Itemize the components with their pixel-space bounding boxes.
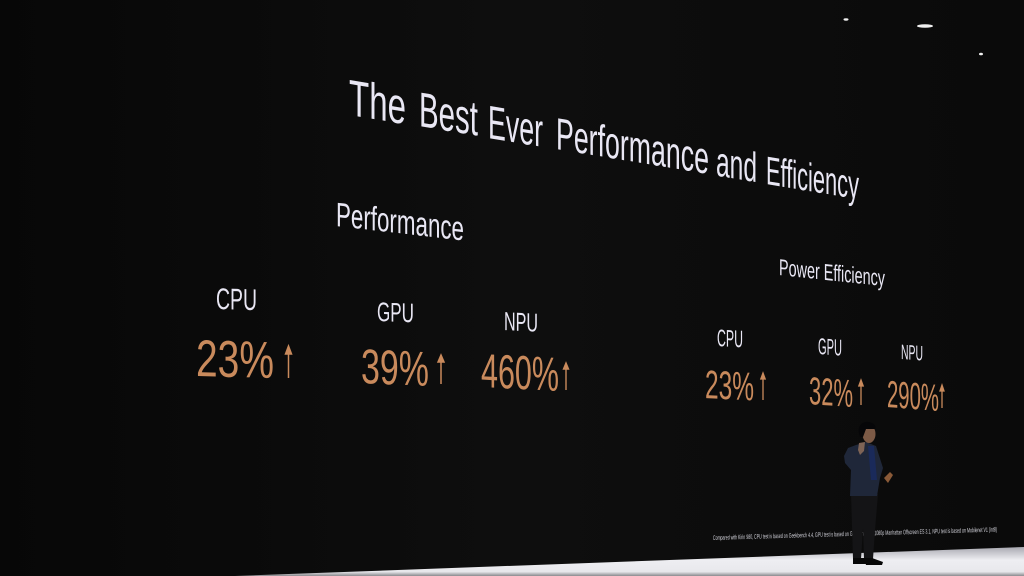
title: Ever	[488, 96, 543, 158]
metric: performance NPU: 460%	[481, 345, 559, 402]
metric: performance GPU: 39%	[361, 340, 429, 397]
title: and	[716, 138, 757, 191]
arrow: up	[859, 380, 863, 405]
arrow: up	[438, 355, 444, 384]
metric: performance GPU	[361, 297, 444, 397]
ceiling lights	[844, 18, 983, 55]
title: Efficiency	[766, 148, 859, 208]
metric: performance CPU: 23%	[196, 330, 274, 390]
metric: efficiency GPU: GPU	[818, 333, 842, 361]
metric: efficiency GPU: 32%	[809, 370, 853, 416]
title: Best	[419, 82, 478, 147]
shoes	[853, 558, 883, 565]
title: Performance	[556, 108, 709, 184]
metric: efficiency GPU	[809, 333, 863, 416]
metric: performance NPU: NPU	[504, 306, 538, 338]
head	[862, 425, 876, 443]
jacket	[844, 442, 883, 496]
presenter	[844, 422, 893, 565]
arrow: up	[761, 373, 765, 400]
metric: performance GPU: GPU	[377, 297, 414, 328]
shirt	[868, 446, 877, 480]
title: The	[349, 69, 406, 135]
metric: efficiency NPU: NPU	[901, 341, 923, 366]
metric: efficiency CPU	[705, 325, 765, 410]
arrow: up	[940, 385, 944, 408]
metric: efficiency NPU	[887, 341, 944, 420]
metric: efficiency NPU: 290%	[887, 374, 939, 420]
metric: efficiency CPU: 23%	[705, 363, 754, 410]
metric: performance CPU	[196, 283, 292, 390]
legs	[851, 494, 878, 559]
arrow: up	[286, 346, 292, 378]
stage floor	[235, 547, 1024, 576]
arrow: up	[564, 363, 568, 390]
heading: performance: Performance	[336, 196, 464, 249]
heading: power efficiency: Power Efficiency	[779, 254, 885, 291]
metric: efficiency CPU: CPU	[717, 325, 743, 353]
hands	[858, 442, 893, 483]
metric: performance NPU	[481, 306, 568, 402]
metric: performance CPU: CPU	[216, 283, 257, 317]
hair	[859, 422, 876, 437]
title	[349, 69, 859, 208]
